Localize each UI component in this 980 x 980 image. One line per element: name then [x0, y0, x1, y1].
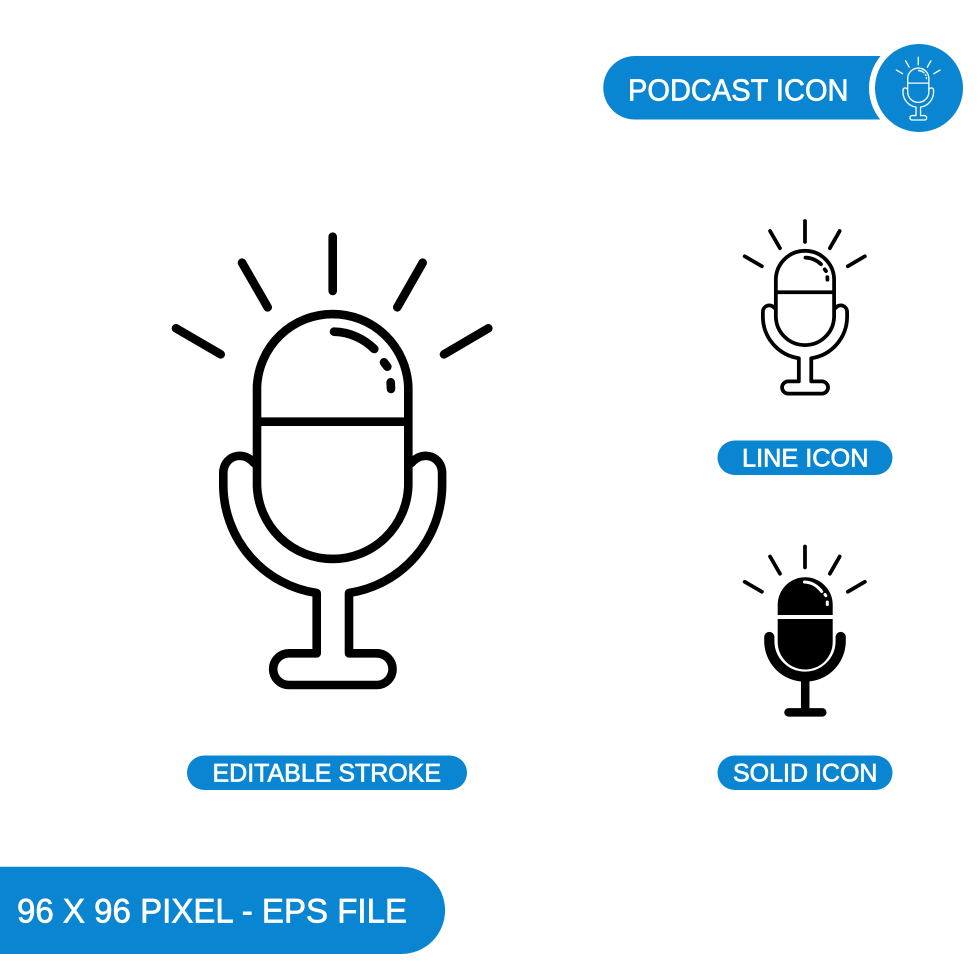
label: line icon — [718, 440, 892, 475]
badge pill — [603, 56, 885, 120]
icon: small white microphone — [896, 57, 940, 120]
line icon pill — [718, 440, 892, 475]
solid icon pill — [718, 756, 892, 790]
icon: small solid microphone — [745, 547, 865, 712]
solid icon text: SOLID ICON — [733, 760, 878, 788]
solid capsule highlight — [804, 582, 827, 604]
editable stroke pill — [187, 756, 467, 790]
line icon text: LINE ICON — [742, 445, 868, 473]
capsule highlight — [334, 332, 391, 389]
solid sound rays — [745, 547, 865, 592]
banner text: 96 X 96 PIXEL - EPS FILE — [17, 892, 407, 930]
badge circle — [875, 44, 963, 132]
solid capsule top — [778, 577, 833, 615]
solid stem and base — [788, 678, 822, 712]
label: solid icon — [718, 756, 892, 790]
badge title: PODCAST ICON — [628, 72, 848, 108]
microphone capsule — [257, 314, 408, 559]
microphone stand — [223, 456, 442, 685]
badge circle white ring — [869, 38, 969, 138]
solid stand — [769, 637, 841, 677]
icon: small line microphone — [745, 221, 865, 394]
solid capsule bottom — [778, 619, 833, 669]
badge: podcast icon — [603, 38, 969, 138]
label: editable stroke — [187, 756, 467, 790]
banner shape — [0, 867, 445, 954]
editable stroke text: EDITABLE STROKE — [212, 760, 441, 788]
icon: large outline microphone — [176, 237, 488, 685]
sound rays — [176, 237, 488, 354]
banner: 96 x 96 pixel - eps file — [0, 867, 445, 954]
